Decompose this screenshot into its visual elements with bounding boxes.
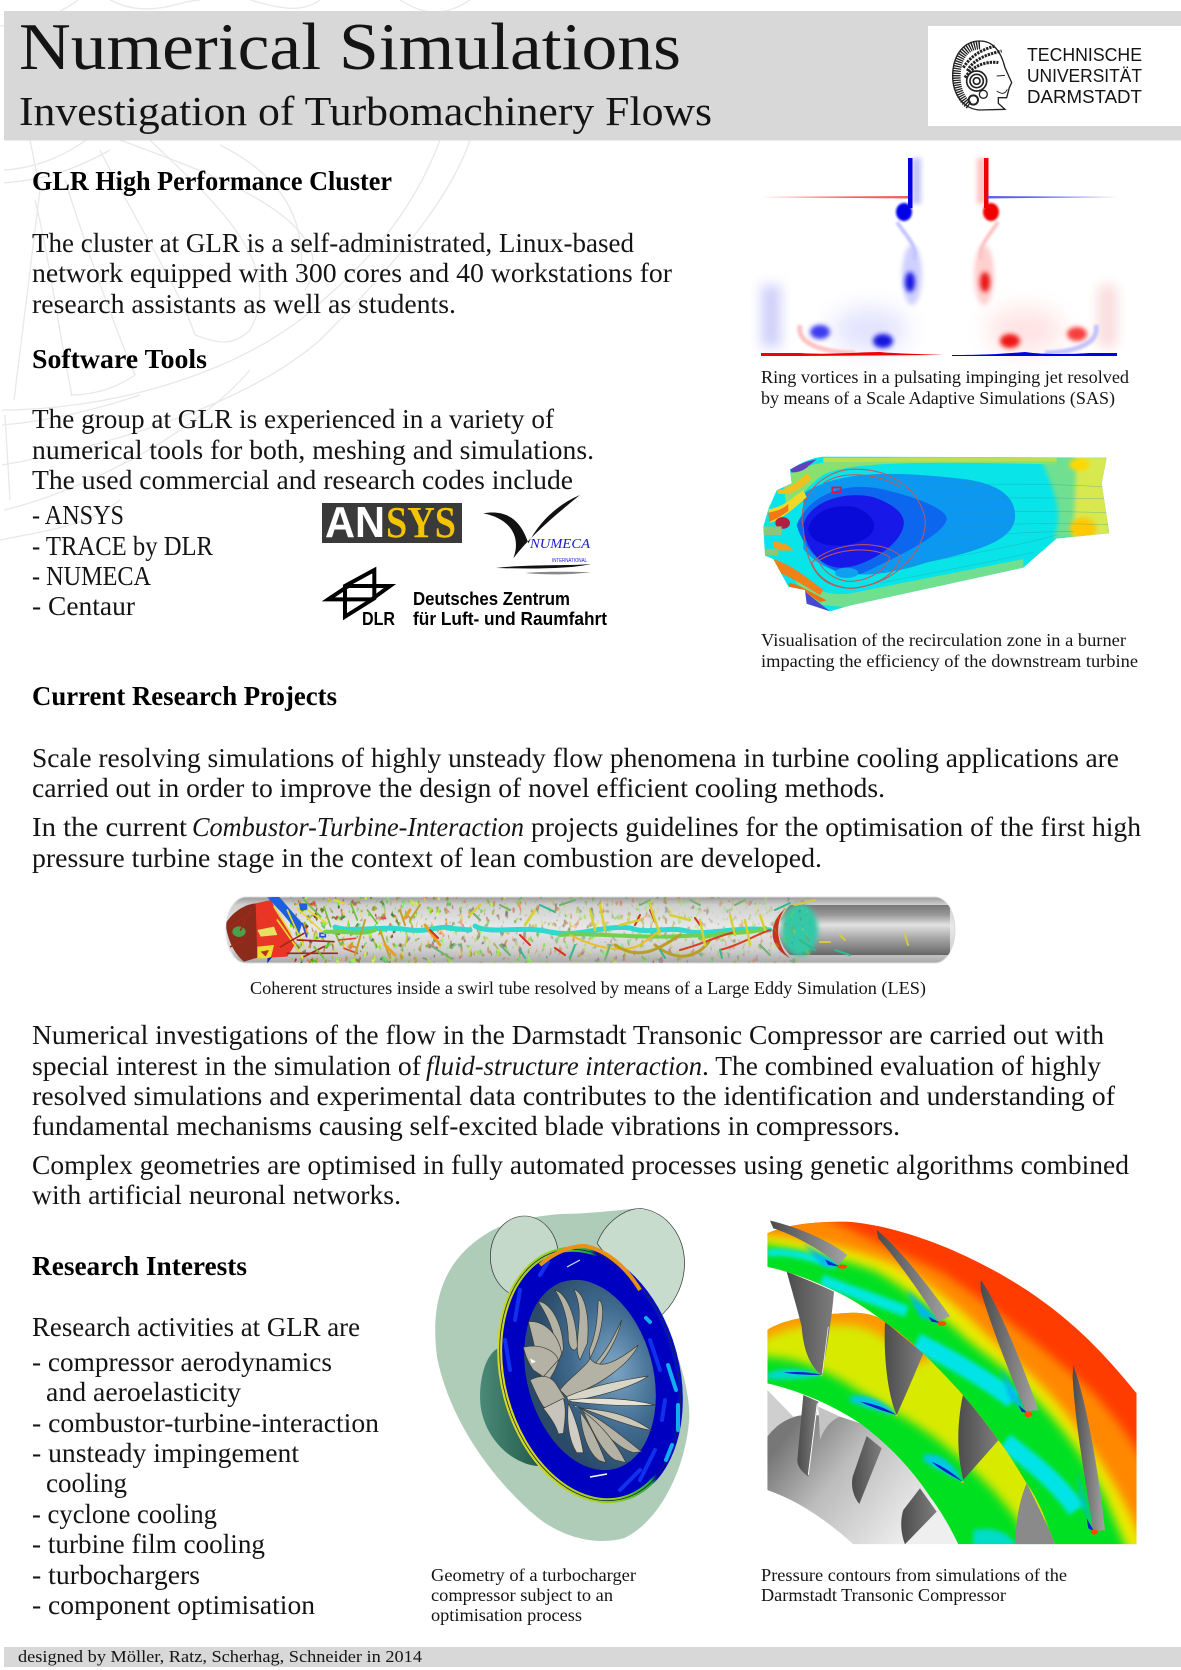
list: research activities: and aeroelasticity	[46, 1377, 242, 1407]
list: research activities: cooling	[46, 1468, 127, 1498]
text: cluster description: research assistants as well as students.	[32, 289, 456, 319]
text: Darmstadt Transonic Compressor: Numerical investigations of the flow in the Darmstadt Transonic Compressor are carried out with	[32, 1020, 1105, 1050]
text: Darmstadt Transonic Compressor: resolved simulations and experimental data contributes to the identification and understanding of	[32, 1081, 1115, 1111]
text: combustor-turbine interaction	[32, 812, 1142, 873]
disc streaks	[505, 1262, 665, 1490]
blades on band one	[770, 1221, 847, 1265]
logo: DLR: für Luft- und Raumfahrt	[413, 609, 607, 629]
logo wordmark: TECHNISCHE	[1027, 44, 1142, 65]
text: research intro: Research activities at GLR are	[32, 1312, 360, 1342]
text: Darmstadt Transonic Compressor: . The combined evaluation of highly	[702, 1051, 1101, 1081]
list: software tools	[32, 500, 213, 621]
caption: turbocharger	[431, 1565, 636, 1625]
text: software description	[32, 404, 594, 495]
heading: GLR High Performance Cluster: GLR High Performance Cluster	[32, 166, 392, 196]
text: combustor-turbine interaction: In the current	[32, 812, 188, 842]
text: scale resolving simulations: Scale resolving simulations of highly unsteady flow phenomena in turbine cooling applications are	[32, 743, 1119, 773]
text: combustor-turbine interaction: projects guidelines for the optimisation of the first high	[531, 812, 1142, 842]
text: optimisation	[32, 1150, 1130, 1210]
subtitle: Investigation of Turbomachinery Flows	[19, 88, 712, 134]
caption: pressure contours: Darmstadt Transonic Compressor	[761, 1585, 1006, 1605]
text: software description: The used commercial and research codes include	[32, 465, 573, 495]
logo: DLR: DLR	[362, 609, 395, 629]
band one	[767, 1222, 1137, 1544]
list: research activities: - turbine film cooling	[32, 1529, 265, 1559]
text: Darmstadt Transonic Compressor: special interest in the simulation of	[32, 1051, 421, 1081]
title: Numerical Simulations	[19, 10, 681, 84]
logo wordmark	[1027, 44, 1142, 107]
text: cluster description: The cluster at GLR is a self-administrated, Linux-based	[32, 228, 634, 258]
logo: DLR	[328, 570, 607, 629]
logo: NUMECA	[483, 495, 591, 574]
trailing edge hot spots	[821, 1265, 1098, 1535]
list: research activities	[32, 1347, 379, 1620]
logo: ANSYS: SYS	[386, 498, 456, 547]
text: software description: The group at GLR is experienced in a variety of	[32, 404, 554, 434]
caption: burner	[761, 630, 1138, 671]
header band	[4, 10, 1181, 140]
TU Darmstadt logo	[928, 26, 1181, 126]
logo: ANSYS	[322, 498, 462, 547]
text: scale resolving simulations: carried out in order to improve the design of novel efficient cooling methods.	[32, 773, 885, 803]
text: cluster description	[32, 228, 672, 319]
text: Darmstadt Transonic Compressor	[32, 1020, 1115, 1141]
text: scale resolving simulations	[32, 743, 1119, 803]
list: software tools: - ANSYS	[32, 500, 124, 530]
caption: turbocharger: optimisation process	[431, 1605, 582, 1625]
heading: Research Interests: Research Interests	[32, 1251, 247, 1281]
logo: NUMECA: INTERNATIONAL	[552, 558, 587, 564]
logo: ANSYS: AN	[325, 498, 385, 547]
caption: burner: impacting the efficiency of the downstream turbine	[761, 651, 1138, 671]
list: research activities: - compressor aerodynamics	[32, 1347, 332, 1377]
logo: NUMECA: NUMECA	[529, 537, 590, 552]
text: combustor-turbine interaction: Combustor-Turbine-Interaction	[192, 812, 524, 842]
watermark: Athena logo outline	[0, 0, 470, 540]
lower blades	[787, 1272, 834, 1375]
logo wordmark: UNIVERSITÄT	[1027, 65, 1142, 86]
text: optimisation: with artificial neuronal networks.	[32, 1180, 401, 1210]
caption: ring vortices	[761, 367, 1129, 408]
list: software tools: - TRACE by DLR	[32, 531, 213, 561]
impeller blades	[523, 1289, 655, 1463]
caption: turbocharger: Geometry of a turbocharger	[431, 1565, 636, 1585]
text: Darmstadt Transonic Compressor: fluid-structure interaction	[426, 1051, 702, 1081]
list: research activities: - turbochargers	[32, 1560, 200, 1590]
caption: pressure contours: Pressure contours from simulations of the	[761, 1565, 1067, 1585]
footer band	[4, 1647, 1181, 1667]
caption: swirl tube: Coherent structures inside a swirl tube resolved by means of a Large Eddy Simulation (LES)	[250, 978, 926, 998]
caption: ring vortices: by means of a Scale Adaptive Simulations (SAS)	[761, 388, 1115, 408]
caption: turbocharger: compressor subject to an	[431, 1585, 613, 1605]
caption: pressure contours	[761, 1565, 1067, 1605]
list: research activities: - cyclone cooling	[32, 1499, 217, 1529]
heading: Software Tools: Software Tools	[32, 344, 207, 374]
text: cluster description: network equipped with 300 cores and 40 workstations for	[32, 258, 672, 288]
inlet swirlers	[768, 490, 807, 523]
chart: compressor pressure contours	[767, 1220, 1137, 1544]
specks	[290, 897, 810, 963]
chart: pulsating jet ring vortices	[761, 158, 1117, 356]
text: optimisation: Complex geometries are optimised in fully automated processes using genetic algorithms combined	[32, 1150, 1130, 1180]
text: Darmstadt Transonic Compressor: fundamental mechanisms causing self-excited blade vibrations in compressors.	[32, 1111, 900, 1141]
footer band: designed by Möller, Ratz, Scherhag, Schneider in 2014	[18, 1647, 423, 1666]
caption: ring vortices: Ring vortices in a pulsating impinging jet resolved	[761, 367, 1129, 387]
hub	[767, 1390, 793, 1437]
icon: Athena head	[953, 41, 1012, 110]
band two	[767, 1312, 1055, 1544]
logo wordmark: DARMSTADT	[1027, 86, 1142, 107]
list: software tools: - Centaur	[32, 591, 135, 621]
logo: DLR: Deutsches Zentrum	[413, 589, 570, 609]
text: software description: numerical tools for both, meshing and simulations.	[32, 435, 594, 465]
list: research activities: - unsteady impingement	[32, 1438, 299, 1468]
chart: swirl tube LES	[226, 897, 955, 963]
list: research activities: - combustor-turbine-interaction	[32, 1408, 379, 1438]
chart: burner recirculation zone	[760, 449, 1113, 614]
list: research activities: - component optimisation	[32, 1590, 316, 1620]
list: software tools: - NUMECA	[32, 561, 151, 591]
chart: turbocharger compressor geometry	[435, 1208, 707, 1541]
caption: burner: Visualisation of the recirculation zone in a burner	[761, 630, 1126, 650]
text: combustor-turbine interaction: pressure turbine stage in the context of lean combustion are developed.	[32, 843, 822, 873]
heading: Current Research Projects: Current Research Projects	[32, 681, 337, 711]
hub blades	[797, 1395, 818, 1477]
